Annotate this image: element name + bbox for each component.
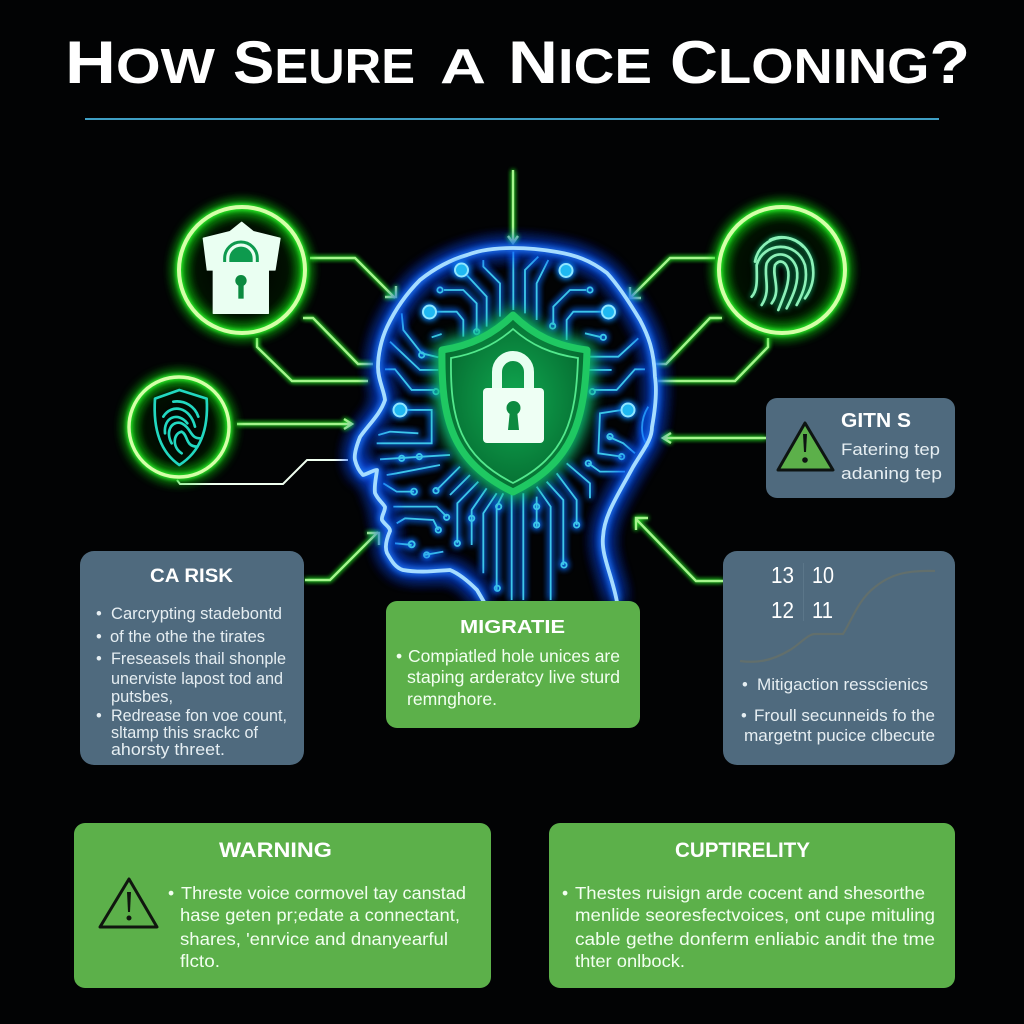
bullet list: • bbox=[96, 628, 102, 646]
bullet list: Mitigaction resscienics bbox=[757, 676, 928, 694]
bullet list: unerviste lapost tod and bbox=[111, 670, 283, 688]
icon: fingerprint shield circle bbox=[129, 377, 229, 477]
text block: staping arderatcy live sturd bbox=[407, 667, 620, 687]
text block bbox=[841, 441, 942, 483]
text block: shares, 'enrvice and dnanyearful bbox=[180, 929, 448, 949]
panel: stats and mitigation bbox=[723, 551, 955, 765]
text block: Thestes ruisign arde cocent and shesorthe bbox=[575, 883, 925, 903]
bullet list bbox=[741, 676, 935, 745]
stats numbers: 11 bbox=[812, 597, 833, 623]
stats numbers: 12 bbox=[771, 597, 794, 623]
heading: CA RISK: CA RISK bbox=[150, 566, 233, 587]
bullet list: • bbox=[96, 605, 102, 623]
bullet list: • bbox=[742, 676, 748, 694]
title bbox=[65, 29, 970, 96]
text block: Threste voice cormovel tay canstad bbox=[181, 883, 466, 903]
stats numbers: 10 bbox=[812, 562, 834, 588]
central shield with padlock bbox=[442, 315, 587, 492]
text block bbox=[168, 883, 466, 971]
title: A bbox=[440, 40, 486, 94]
bullet list: • bbox=[96, 650, 102, 668]
icon: padlock shield circle bbox=[179, 207, 305, 333]
panel: CA RISK bbox=[80, 551, 304, 765]
text block: • bbox=[168, 883, 174, 903]
bullet list: ahorsty threet. bbox=[111, 741, 225, 759]
text block: Fatering tep bbox=[841, 441, 940, 459]
bullet list: margetnt pucice clbecute bbox=[744, 727, 935, 745]
text block: thter onlbock. bbox=[575, 951, 685, 971]
text block: flcto. bbox=[180, 951, 220, 971]
bullet list: Carcrypting stadebontd bbox=[111, 605, 282, 623]
panel: GITN S bbox=[766, 398, 955, 498]
bullet list: sltamp this srackc of bbox=[111, 724, 258, 742]
head outline bbox=[355, 248, 656, 602]
connector: white line bbox=[177, 460, 348, 484]
bullet list: • bbox=[96, 707, 102, 725]
heading: MIGRATIE: MIGRATIE bbox=[460, 617, 565, 637]
panel: MIGRATIE bbox=[386, 601, 640, 728]
head circuit traces bbox=[377, 252, 648, 600]
icon: fingerprint circle bbox=[719, 207, 845, 333]
title: HOW bbox=[65, 29, 216, 96]
text block: remnghore. bbox=[407, 689, 497, 709]
bullet list: of the othe the tirates bbox=[110, 628, 265, 646]
bullet list: Redrease fon voe count, bbox=[111, 707, 287, 725]
panel: CUPTIRELITY bbox=[549, 823, 955, 988]
bullet list: Freseasels thail shonple bbox=[111, 650, 286, 668]
icon: warning triangle bbox=[778, 423, 833, 470]
heading: WARNING: WARNING bbox=[219, 839, 332, 862]
text block: menlide seoresfectvoices, ont cupe mituling bbox=[575, 905, 935, 925]
line chart bbox=[740, 571, 935, 662]
title: NICE bbox=[508, 29, 652, 96]
text block: • bbox=[396, 646, 402, 666]
text block: cable gethe donferm enliabic andit the tme bbox=[575, 929, 935, 949]
text block: hase geten pr;edate a connectant, bbox=[180, 905, 460, 925]
stats numbers: 13 bbox=[771, 562, 794, 588]
title: SEURE bbox=[233, 29, 415, 96]
title: CLONING ? bbox=[670, 29, 970, 96]
bullet list bbox=[96, 605, 287, 759]
bullet list: putsbes, bbox=[111, 688, 173, 706]
bullet list: Froull secunneids fo the bbox=[754, 707, 935, 725]
panel: WARNING bbox=[74, 823, 491, 988]
text block bbox=[562, 883, 935, 971]
heading: CUPTIRELITY: CUPTIRELITY bbox=[675, 839, 810, 862]
bullet list: • bbox=[741, 707, 747, 725]
heading: GITN S: GITN S bbox=[841, 410, 911, 432]
head illustration bbox=[355, 248, 656, 602]
connector arrows bbox=[237, 170, 768, 581]
text block: • bbox=[562, 883, 568, 903]
icon: warning triangle outline bbox=[100, 879, 157, 927]
stats numbers bbox=[771, 562, 834, 623]
text block bbox=[396, 646, 620, 709]
head nodes bbox=[394, 264, 634, 416]
text block: adaning tep bbox=[841, 465, 942, 483]
text block: Compiatled hole unices are bbox=[408, 646, 620, 666]
